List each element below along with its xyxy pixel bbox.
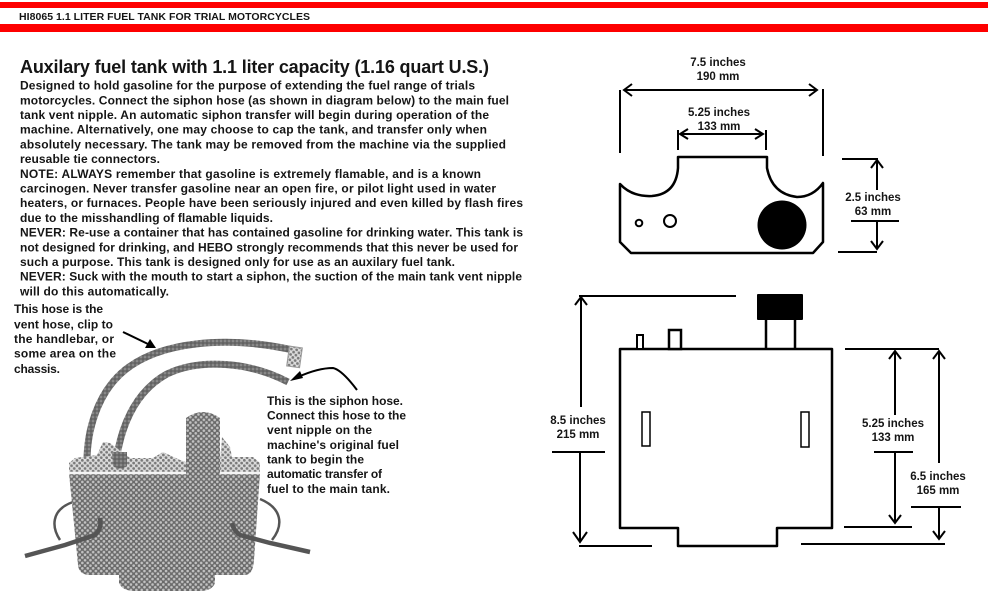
description text block: NOTE: ALWAYS remember that gasoline is extremely flamable, and is a known bbox=[20, 167, 481, 181]
callout: siphon hose: fuel to the main tank. bbox=[267, 482, 390, 496]
description text block: not designed for drinking, and HEBO strongly recommends that this never be used for bbox=[20, 240, 518, 254]
height dimension 2.5 inches bbox=[838, 159, 901, 252]
top view outline bbox=[620, 157, 823, 253]
illustration: fuel tank photo bbox=[25, 342, 310, 591]
large nipple bbox=[669, 330, 681, 349]
filler neck bbox=[186, 412, 220, 478]
description text block: will do this automatically. bbox=[19, 284, 169, 298]
callout: vent hose bbox=[14, 302, 116, 376]
width dimension 5.25 inches bbox=[678, 107, 766, 150]
height dimension 6.5 inches bbox=[801, 351, 966, 544]
callout: siphon hose: vent nipple on the bbox=[267, 423, 372, 437]
siphon hose bbox=[118, 364, 288, 450]
vent nipple bbox=[636, 220, 642, 226]
callout: vent hose: vent hose, clip to bbox=[14, 318, 113, 332]
callout: siphon hose: Connect this hose to the bbox=[267, 408, 406, 422]
description text block: NEVER: Re-use a container that has contained gasoline for drinking water. This tank is bbox=[20, 226, 523, 240]
height dimension 5.25 inches: 5.25 inches bbox=[862, 418, 924, 430]
header title: HI8065 1.1 LITER FUEL TANK FOR TRIAL MOTORCYCLES bbox=[19, 11, 310, 23]
callout: siphon hose: automatic transfer of bbox=[267, 467, 383, 481]
right strap loop bbox=[260, 499, 279, 540]
description text block bbox=[19, 79, 523, 298]
siphon nipple bbox=[664, 215, 676, 227]
height dimension 8.5 inches: 215 mm bbox=[557, 429, 599, 441]
filler cap bbox=[758, 200, 806, 250]
small nipple bbox=[637, 335, 643, 349]
description text block: carcinogen. Never transfer gasoline near an open fire, or pilot light used in water bbox=[20, 182, 496, 196]
arrow: siphon hose pointer bbox=[290, 368, 357, 390]
callout: vent hose: This hose is the bbox=[14, 302, 103, 316]
height dimension 6.5 inches: 6.5 inches bbox=[910, 471, 966, 483]
height dimension 8.5 inches bbox=[550, 296, 736, 546]
callout: vent hose: the handlebar, or bbox=[14, 332, 114, 346]
callout: siphon hose: machine's original fuel bbox=[267, 438, 399, 452]
vent hose bbox=[87, 342, 293, 467]
tank body bbox=[69, 473, 260, 591]
arrow: vent hose pointer bbox=[123, 332, 156, 348]
filler cap bbox=[757, 294, 803, 320]
header bottom red bar bbox=[0, 24, 988, 32]
description text block: machine. Alternatively, one may choose to cap the tank, and transfer only when bbox=[20, 123, 487, 137]
callout: vent hose: chassis. bbox=[14, 362, 60, 376]
heading: Auxilary fuel tank with 1.1 liter capacity (1.16 quart U.S.) bbox=[20, 57, 489, 77]
header top red bar bbox=[0, 2, 988, 8]
callout: siphon hose bbox=[267, 394, 406, 496]
description text block: tank vent nipple. An automatic siphon transfer will begin during operation of the bbox=[20, 108, 489, 122]
height dimension 8.5 inches: 8.5 inches bbox=[550, 415, 606, 427]
tank outline bbox=[620, 349, 832, 546]
right strap bbox=[232, 523, 310, 552]
left strap loop bbox=[54, 502, 73, 540]
height dimension 2.5 inches: 63 mm bbox=[855, 206, 891, 218]
tank highlight line bbox=[69, 472, 260, 474]
callout: vent hose: some area on the bbox=[14, 346, 116, 360]
height dimension 2.5 inches: 2.5 inches bbox=[845, 192, 901, 204]
description text block: absolutely necessary. The tank may be removed from the machine via the supplied bbox=[20, 137, 506, 151]
callout: siphon hose: tank to begin the bbox=[267, 452, 364, 466]
description text block: motorcycles. Connect the siphon hose (as shown in diagram below) to the main fuel bbox=[20, 93, 509, 107]
side view diagram bbox=[550, 294, 966, 546]
header banner bbox=[0, 2, 988, 32]
description text block: due to the misshandling of flamable liquids. bbox=[20, 211, 273, 225]
width dimension 7.5 inches bbox=[620, 57, 823, 156]
height dimension 5.25 inches: 133 mm bbox=[872, 432, 914, 444]
description text block: Designed to hold gasoline for the purpose of extending the fuel range of trials bbox=[20, 79, 475, 93]
top view diagram bbox=[620, 57, 901, 253]
width dimension 7.5 inches: 190 mm bbox=[697, 71, 739, 83]
hose clip bbox=[287, 346, 302, 368]
left strap bbox=[25, 518, 100, 556]
description text block: heaters, or furnaces. People have been seriously injured and even killed by flash fires bbox=[20, 196, 523, 210]
width dimension 7.5 inches: 7.5 inches bbox=[690, 57, 746, 69]
callout: siphon hose: This is the siphon hose. bbox=[267, 394, 403, 408]
right strap slot bbox=[801, 412, 809, 447]
description text block: reusable tie connectors. bbox=[20, 152, 160, 166]
filler neck bbox=[766, 320, 795, 349]
description text block: NEVER: Suck with the mouth to start a siphon, the suction of the main tank vent nipple bbox=[20, 270, 522, 284]
description text block: such a purpose. This tank is designed only for use as an auxilary fuel tank. bbox=[20, 255, 455, 269]
tank top highlight bbox=[69, 437, 260, 472]
width dimension 5.25 inches: 5.25 inches bbox=[688, 107, 750, 119]
width dimension 5.25 inches: 133 mm bbox=[698, 121, 740, 133]
siphon nipple bbox=[112, 452, 127, 468]
left strap slot bbox=[642, 412, 650, 446]
height dimension 6.5 inches: 165 mm bbox=[917, 485, 959, 497]
height dimension 5.25 inches bbox=[844, 349, 939, 527]
